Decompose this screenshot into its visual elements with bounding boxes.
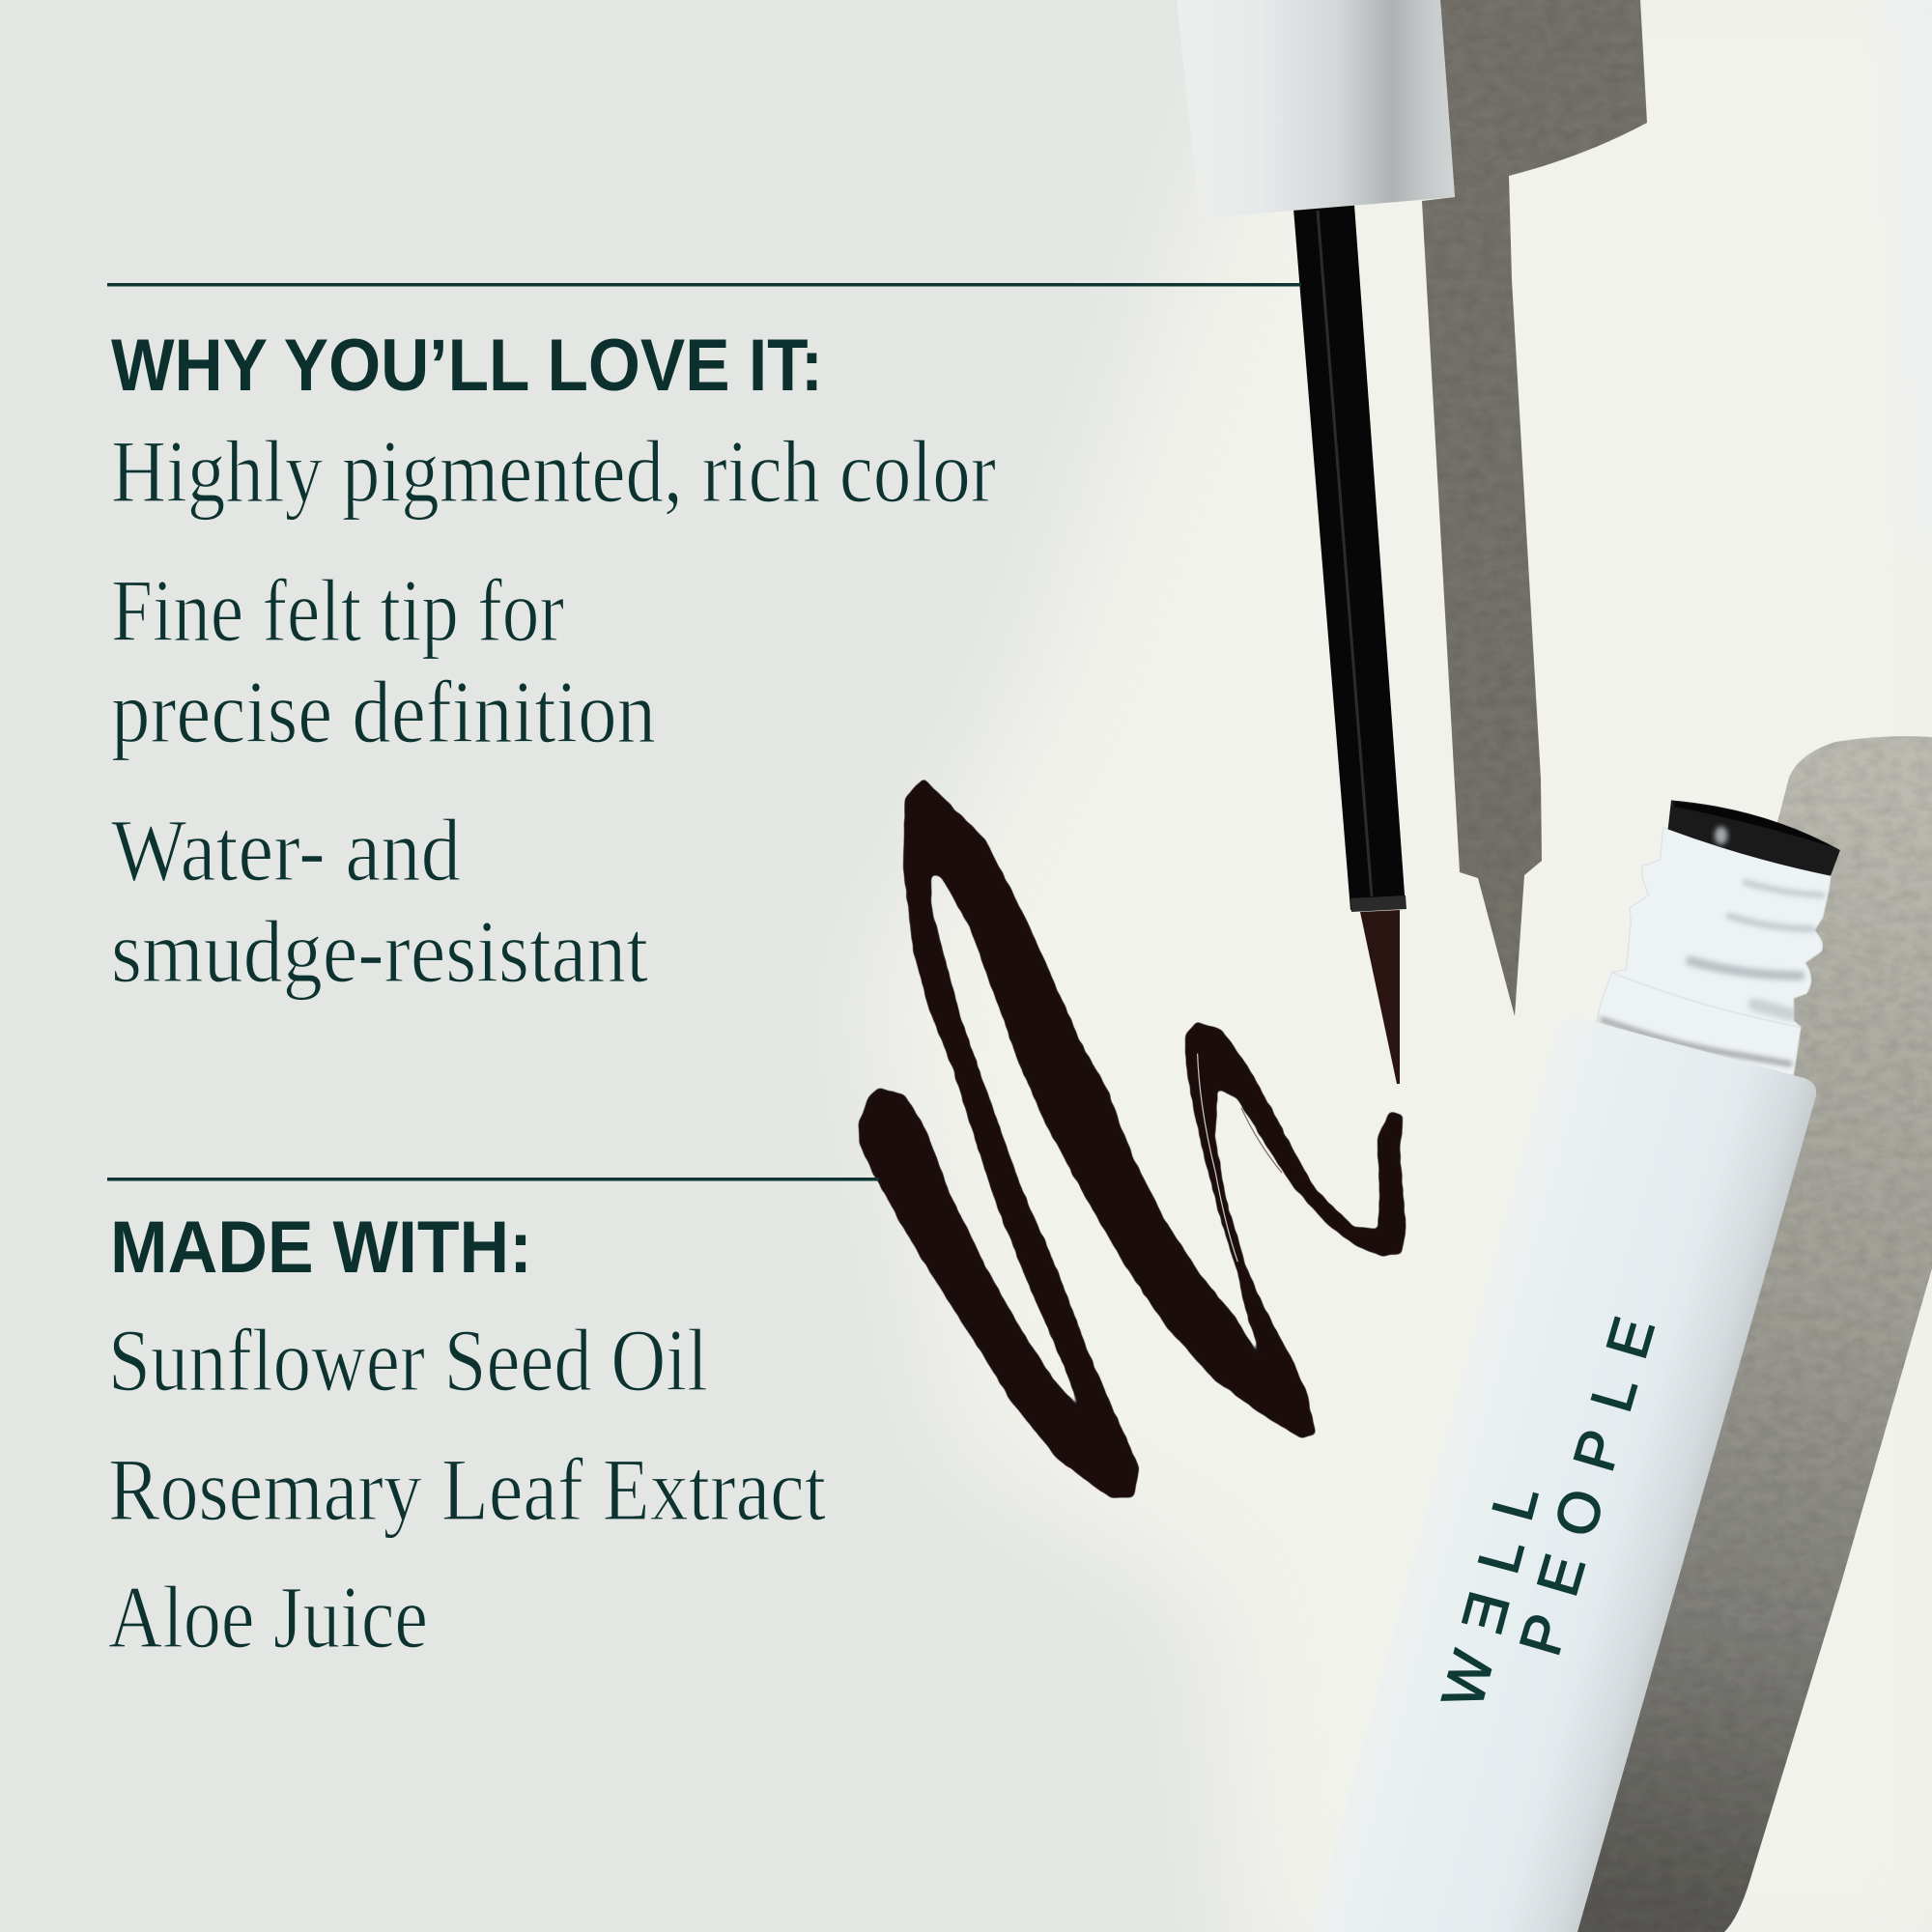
heading: WHY YOU’LL LOVE IT: bbox=[111, 325, 823, 407]
benefit list: Water- and bbox=[111, 801, 461, 899]
thread grooves bbox=[1690, 882, 1823, 1014]
rod bbox=[1293, 205, 1406, 912]
section: why you'll love it bbox=[107, 283, 1301, 1001]
heading: MADE WITH: bbox=[110, 1207, 532, 1289]
benefit list: Fine felt tip for bbox=[111, 561, 564, 660]
benefit list: smudge-resistant bbox=[111, 902, 648, 1001]
shadow: applicator and cap bbox=[1422, 0, 1647, 1016]
ingredient list: Rosemary Leaf Extract bbox=[108, 1440, 826, 1539]
benefit list: precise definition bbox=[111, 663, 656, 761]
shadow: tube bbox=[1507, 736, 1932, 1932]
tube bbox=[1312, 800, 1840, 1932]
tube neck with threads bbox=[1597, 800, 1840, 1092]
ingredient list bbox=[108, 1311, 826, 1666]
black bottle opening bbox=[1668, 800, 1840, 876]
logo: WELL PEOPLE: WƎLL bbox=[1430, 1479, 1550, 1714]
swatch brush streaks bbox=[1198, 1054, 1282, 1262]
benefit list: Highly pigmented, rich color bbox=[111, 422, 996, 521]
collar edge bbox=[1611, 973, 1800, 1027]
ingredient list: Sunflower Seed Oil bbox=[108, 1311, 708, 1409]
collar contact shadow bbox=[1601, 1019, 1792, 1065]
cap bbox=[1177, 0, 1455, 218]
benefit list bbox=[111, 422, 996, 1001]
section: made with bbox=[107, 1178, 879, 1666]
applicator: rod, felt tip and cap bbox=[1177, 0, 1455, 1084]
felt tip bbox=[1360, 910, 1400, 1084]
logo: WELL PEOPLE: PEOPLE bbox=[1507, 1310, 1667, 1662]
logo: WELL PEOPLE bbox=[1430, 1310, 1667, 1714]
ingredient list: Aloe Juice bbox=[108, 1568, 428, 1666]
tube body bbox=[1312, 1017, 1816, 1932]
eyeliner swatch bbox=[859, 779, 1406, 1497]
